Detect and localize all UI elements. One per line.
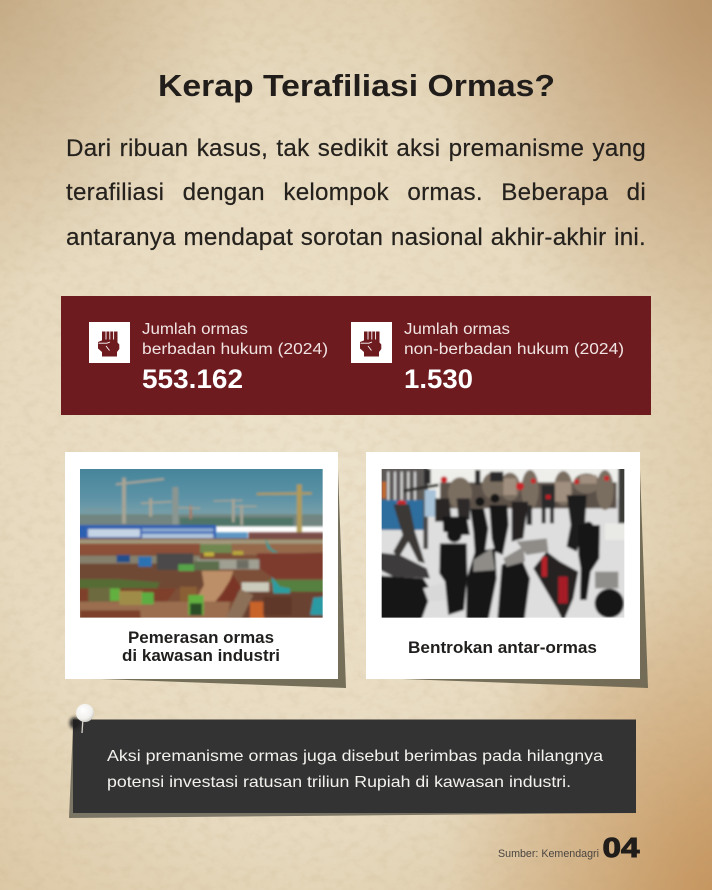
stat: mass organisations without legal status: non-berbadan hukum (2024) bbox=[404, 341, 624, 358]
icon: fist, legal mass organisations bbox=[89, 322, 130, 363]
stat: mass organisations with legal status: Jumlah ormas bbox=[142, 321, 248, 338]
stat: mass organisations with legal status: 553.162 bbox=[142, 364, 243, 394]
text: callout message: Aksi premanisme ormas juga disebut berimbas pada hilangnya bbox=[107, 748, 603, 765]
title: Kerap Terafiliasi Ormas? bbox=[158, 69, 555, 103]
stat: mass organisations without legal status bbox=[404, 321, 624, 394]
text block: introduction: antaranya mendapat sorotan nasional akhir-akhir ini. bbox=[66, 224, 646, 251]
caption: industrial area extortion bbox=[122, 629, 280, 665]
caption: clash between groups: Bentrokan antar-ormas bbox=[408, 639, 597, 657]
text: callout message: potensi investasi ratusan triliun Rupiah di kawasan industri. bbox=[107, 774, 571, 791]
stat: mass organisations with legal status bbox=[142, 321, 328, 394]
text block: introduction: terafiliasi dengan kelompok ormas. Beberapa di bbox=[66, 179, 646, 206]
text: callout message bbox=[107, 748, 603, 791]
callout: investment loss note bbox=[69, 704, 636, 818]
icon: fist, non-legal mass organisations bbox=[351, 322, 392, 363]
photo: construction site bbox=[80, 469, 323, 618]
stat: mass organisations without legal status: Jumlah ormas bbox=[404, 321, 510, 338]
text block: introduction: Dari ribuan kasus, tak sedikit aksi premanisme yang bbox=[66, 135, 646, 162]
source note: Sumber: Kemendagri bbox=[498, 848, 599, 860]
page number: 04 bbox=[602, 832, 640, 863]
stat: mass organisations with legal status: berbadan hukum (2024) bbox=[142, 341, 328, 358]
panel: photo card, industrial area bbox=[65, 452, 346, 688]
panel: photo card, clash bbox=[366, 452, 648, 688]
text block: introduction bbox=[66, 135, 646, 251]
photo: clash between groups bbox=[382, 469, 624, 618]
caption: industrial area extortion: di kawasan industri bbox=[122, 647, 280, 665]
caption: industrial area extortion: Pemerasan ormas bbox=[128, 629, 274, 647]
icon: white push pin bbox=[76, 704, 94, 733]
panel: statistics banner bbox=[61, 296, 651, 415]
stat: mass organisations without legal status: 1.530 bbox=[404, 364, 473, 394]
